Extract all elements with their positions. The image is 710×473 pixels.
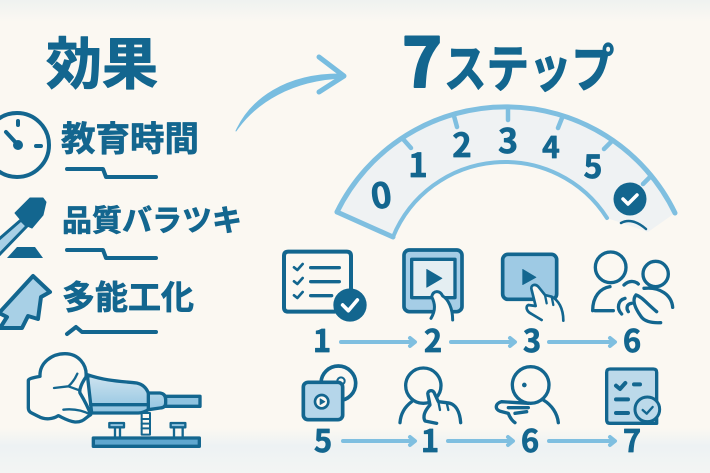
step numbers xyxy=(314,416,641,461)
icon: clock xyxy=(0,113,49,177)
icon: person pointing xyxy=(496,367,558,423)
step numbers: 2 xyxy=(424,316,442,361)
step numbers: 1 xyxy=(421,416,439,461)
rising line xyxy=(67,327,156,334)
step numbers: 6 xyxy=(623,316,641,361)
icon: dropper xyxy=(0,198,46,258)
stepped line xyxy=(67,250,156,258)
icon: two people with gesture xyxy=(593,252,673,323)
effect item: multi-skilling xyxy=(0,271,194,334)
icon: person with finger xyxy=(400,368,461,423)
arrows xyxy=(343,437,615,445)
step numbers: 5 xyxy=(314,416,332,461)
gauge numbers: 3 xyxy=(498,114,518,163)
gauge numbers: 1 xyxy=(408,139,428,187)
gauge numbers: 4 xyxy=(542,123,560,167)
step numbers: 1 xyxy=(313,316,331,361)
stepped line xyxy=(67,169,156,177)
effect item: training time xyxy=(0,111,199,177)
icon: play tile with pointer xyxy=(503,254,563,321)
curved arrow xyxy=(236,57,344,131)
icon: checklist xyxy=(284,252,367,322)
step numbers: 7 xyxy=(623,416,641,461)
gauge band xyxy=(337,107,675,237)
step row 2 xyxy=(303,366,660,461)
gauge numbers: 2 xyxy=(452,119,472,167)
icon: video tile with disc xyxy=(303,366,356,420)
icon: check badge xyxy=(614,182,646,229)
icon: hand with drill tool xyxy=(28,354,200,446)
title: 7ステップ: 7 xyxy=(402,8,442,107)
step numbers xyxy=(313,316,641,361)
label: 教育時間: 教育時間 xyxy=(61,111,199,161)
gauge numbers: 5 xyxy=(584,142,602,188)
arrows xyxy=(341,338,615,346)
icon: report with check xyxy=(607,369,660,423)
gauge numbers xyxy=(367,114,602,220)
effect item: quality variation xyxy=(0,196,242,258)
step numbers: 3 xyxy=(523,316,541,361)
title: 効果: 効果 xyxy=(46,20,158,101)
label: 品質バラツキ: 品質バラツキ xyxy=(62,196,242,240)
icon: video with tapping hand xyxy=(404,250,462,320)
gauge xyxy=(337,107,675,237)
title: 7ステップ: ステップ xyxy=(444,28,614,102)
gauge numbers: 0 xyxy=(367,167,395,220)
step row 1 xyxy=(284,250,673,361)
label: 多能工化: 多能工化 xyxy=(62,271,194,319)
gauge outline xyxy=(337,107,675,237)
step numbers: 6 xyxy=(521,416,539,461)
icon: up arrow xyxy=(0,276,50,328)
